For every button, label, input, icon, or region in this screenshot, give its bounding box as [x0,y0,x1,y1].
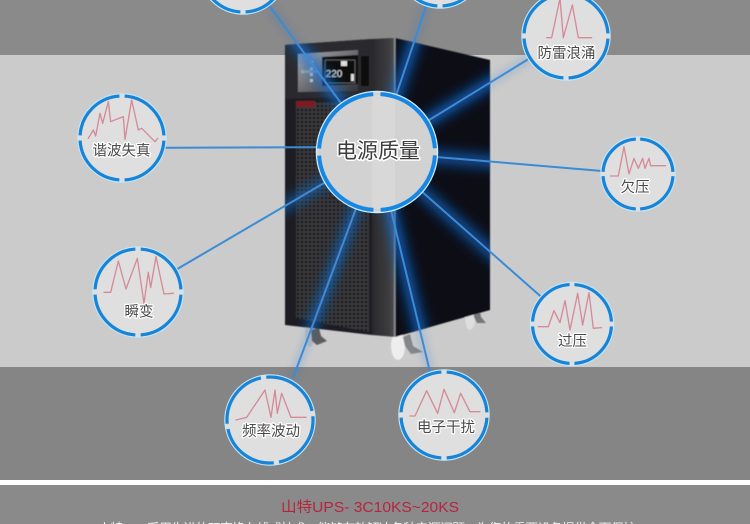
node: 防雷浪涌 [521,0,611,81]
node: 瞬变 [92,246,184,338]
wave: 过压 [538,293,602,330]
wave: 频率波动 [236,390,306,420]
main hub: 电源质量 [315,90,439,214]
node: 频率波动: 频率波动 [242,423,300,440]
casters [305,306,486,360]
cabinet front door [285,39,372,335]
brand badge [296,101,315,107]
node: top-left (cropped) [198,0,288,15]
node: 防雷浪涌: 防雷浪涌 [538,45,596,62]
wave: 瞬变 [104,257,173,303]
control panel: 220 [326,69,343,80]
control panel: SANTAK [301,69,319,74]
node: 欠压: 欠压 [620,179,650,196]
main hub: 电源质量: 电源质量 [336,140,420,163]
UPS cabinet [285,38,490,360]
node: 频率波动 [223,373,317,467]
glow on cabinet [285,40,490,334]
node: 过压: 过压 [558,333,587,350]
node: 谐波失真: 谐波失真 [92,142,150,160]
perforated vent [296,102,369,332]
node: 欠压 [601,137,675,211]
control panel [285,39,372,99]
connector lines [122,0,638,378]
node: 谐波失真 [77,93,167,183]
product title: 山特UPS- 3C10KS~20KS [281,499,459,516]
cabinet pillar [372,38,395,337]
node: 过压 [530,282,614,366]
wave: 欠压 [611,147,666,176]
wave: 电子干扰 [410,389,480,416]
wave: 谐波失真 [88,100,158,142]
node: 电子干扰: 电子干扰 [417,419,475,436]
node: top-right (cropped) [395,0,485,9]
node: 电子干扰 [398,369,490,461]
node: 瞬变: 瞬变 [124,304,154,320]
wave: 防雷浪涌 [547,0,592,38]
cabinet side panel [395,38,490,337]
